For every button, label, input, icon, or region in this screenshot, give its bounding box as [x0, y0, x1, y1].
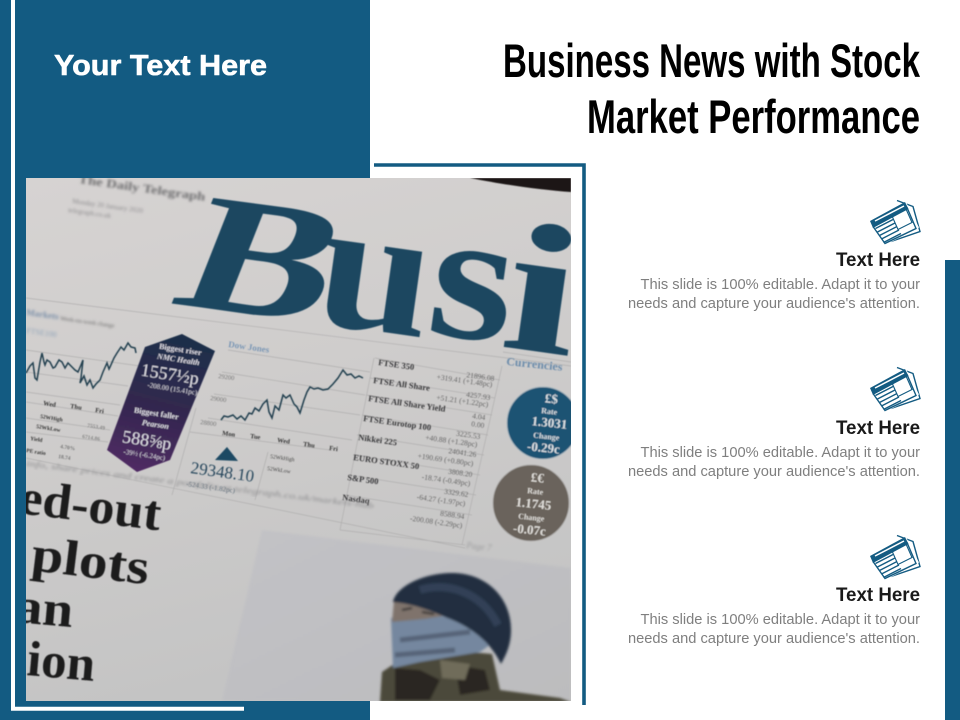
photo: left chart labels: 18.74: [58, 454, 71, 462]
photo: Dow Jones chart: Tue: [250, 433, 261, 441]
photo: dark background corner: [470, 178, 571, 192]
item 2: [628, 368, 920, 480]
photo: stock index table: -64.27 (-1.97pc): [416, 492, 466, 508]
photo: masthead word: B: [154, 159, 373, 358]
photo: biggest riser and faller tag: [107, 334, 215, 472]
photo: stock index table: 8588.94: [440, 509, 465, 521]
photo: pound to dollar badge: 1.3031: [531, 413, 568, 432]
photo: newspaper small masthead: The Daily Telegraph: [78, 172, 207, 204]
photo: biggest riser and faller tag: NMC Health: [156, 352, 201, 367]
photo: pound to euro badge: Change: [518, 512, 545, 523]
photo: stock index table: 3808.20: [448, 467, 473, 479]
photo: newspaper small masthead: Markets: [26, 307, 60, 322]
item 1 description: [628, 277, 920, 312]
photo: stock index table: FTSE 350: [378, 357, 415, 372]
photo: stock index table: 4.04: [472, 411, 486, 422]
photo: Dow Jones chart: 29200: [218, 373, 235, 382]
photo: left chart labels: PE ratio: [26, 448, 46, 457]
newspaper photo: [13, 159, 594, 702]
photo: left chart labels: 52WkLow: [36, 424, 61, 434]
photo: left line chart: [26, 343, 136, 388]
photo: Dow Jones chart: 52WkLow: [267, 466, 291, 475]
photo: stock index table: -18.74 (-0.49pc): [421, 472, 471, 488]
item 1: [628, 200, 920, 312]
photo: stock index table: [342, 357, 495, 530]
right blue bar: [945, 260, 960, 720]
photo: Dow Jones chart: 29000: [210, 395, 227, 404]
photo: headline text: an: [13, 577, 76, 638]
photo: stock index table: 0.00: [471, 419, 485, 430]
photo: pound to dollar badge: Rate: [541, 406, 558, 417]
photo: Dow Jones chart: 52WkHigh: [270, 454, 295, 463]
photo: stock index table: 21896.08: [466, 370, 495, 383]
photo: newspaper small masthead: telegraph.co.uk: [68, 206, 112, 220]
photo: currencies heading: Currencies: [506, 354, 564, 374]
photo: left chart labels: 52WHigh: [40, 414, 63, 424]
photo: left chart labels: Yield: [30, 436, 43, 444]
photo: left chart labels: Thu: [70, 403, 83, 412]
photo: stock index table: FTSE Eurotop 100: [363, 413, 432, 432]
photo: newspaper small masthead: Week-on-week change: [60, 316, 115, 330]
item 3 description: needs and capture your audience's attention.: [628, 631, 920, 647]
item 2 description: This slide is 100% editable. Adapt it to your: [641, 445, 920, 461]
item 3: [628, 536, 920, 647]
blue frame around photo: [374, 165, 584, 705]
item 3 description: This slide is 100% editable. Adapt it to your: [641, 612, 920, 628]
photo: caption strip: info, share prices and create a portfolio at telegraph.co.uk/markets-hub: [26, 459, 374, 511]
item 2 description: [628, 445, 920, 480]
photo: Dow Jones chart: Fri: [329, 445, 338, 453]
icon: newspaper: [870, 536, 920, 580]
photo: pound to euro badge: 1.1745: [515, 494, 553, 513]
photo: Dow Jones chart: 28800: [200, 419, 217, 428]
photo: newspaper small masthead: Monday 20 January 2020: [72, 197, 144, 215]
photo: page label: Page 7: [465, 540, 493, 553]
photo: table rules: [26, 298, 571, 548]
photo: masthead word: s: [418, 170, 530, 384]
photo: masthead word: i: [492, 184, 594, 397]
white frame on blue panel: [13, 0, 244, 709]
photo: Dow Jones index value: -524.33 (-1.82pc): [186, 480, 236, 495]
photo: biggest riser and faller tag: -39½ (-6.24pc): [123, 448, 166, 462]
photo: stock index table: +40.88 (+1.28pc): [425, 433, 478, 449]
photo: Dow Jones chart: Wed: [277, 437, 291, 446]
photo: pound to dollar badge: £$: [544, 390, 559, 407]
photo: stock index table: 24041.26: [448, 446, 477, 459]
photo: Dow Jones chart: Mon: [222, 430, 236, 439]
photo: stock index table: Nasdaq: [342, 492, 371, 506]
photo: stock index table: 3225.53: [456, 429, 481, 441]
photo: pound to euro badge: [493, 465, 569, 541]
photo: stock index table: -200.08 (-2.29pc): [410, 514, 463, 530]
photo: masked person: [380, 573, 571, 702]
item 3 description: [628, 612, 920, 647]
photo: inset picture: [334, 542, 419, 552]
photo: Dow Jones index value: 29348.10: [189, 458, 255, 486]
photo: stock index table: +319.41 (+1.48pc): [436, 372, 493, 389]
photo: stock index table: +51.21 (+1.22pc): [436, 393, 489, 409]
photo: Dow Jones chart: Dow Jones: [228, 339, 270, 355]
photo: stock index table: S&P 500: [347, 472, 379, 486]
photo: stock index table: +190.69 (+0.80pc): [417, 451, 474, 468]
photo: stock index table: 4257.93: [466, 390, 491, 402]
photo: pound to euro badge: Rate: [527, 486, 544, 497]
photo: newspaper small masthead: [26, 172, 207, 339]
photo: newspaper small masthead: FTSE100: [26, 326, 57, 339]
icon: newspaper: [870, 368, 920, 412]
photo: left chart labels: Fri: [95, 407, 105, 415]
photo: stock index table: Nikkei 225: [358, 432, 398, 447]
photo: pound to dollar badge: -0.29c: [526, 438, 561, 457]
photo: pound to euro badge: £€: [530, 469, 545, 486]
item 3 heading: Text Here: [836, 585, 920, 606]
photo: pound to dollar badge: [507, 387, 579, 459]
icon: newspaper: [870, 200, 920, 244]
photo: pound to euro badge: -0.07c: [512, 520, 547, 539]
photo: left chart labels: 4.70%: [60, 444, 76, 452]
photo: masthead word: u: [306, 160, 448, 378]
photo: biggest riser and faller tag: Biggest riser: [159, 342, 203, 357]
photo: headline text: ion: [25, 630, 98, 692]
photo: left chart labels: Wed: [43, 400, 57, 409]
item 2 description: needs and capture your audience's attention.: [628, 464, 920, 480]
photo: Dow Jones index value: [186, 447, 255, 495]
photo: stock index table: 3329.62: [444, 487, 469, 499]
photo: biggest riser and faller tag: 1557½p: [139, 360, 200, 389]
photo: left chart labels: [26, 400, 106, 462]
photo: masthead word: [171, 197, 571, 356]
photo: stock index table: EURO STOXX 50: [353, 452, 420, 471]
photo: left chart labels: 7553.49: [87, 423, 106, 432]
photo: stock index table: FTSE All Share: [373, 375, 431, 393]
item 1 description: This slide is 100% editable. Adapt it to your: [641, 277, 920, 293]
panel heading: Your Text Here: [54, 50, 267, 82]
left blue panel: [0, 0, 370, 720]
photo: headline text: ed-out: [17, 468, 165, 541]
photo: biggest riser and faller tag: 588⅝p: [121, 426, 173, 454]
photo: headline text: plots: [29, 525, 153, 595]
photo: Dow Jones chart: [200, 339, 363, 475]
photo: biggest riser and faller tag: Pearson: [141, 418, 170, 431]
item 1 heading: Text Here: [836, 250, 920, 271]
item 2 heading: Text Here: [836, 418, 920, 439]
photo: Dow Jones chart: Thu: [303, 441, 316, 450]
photo: biggest riser and faller tag: Biggest faller: [133, 406, 180, 422]
photo: left chart labels: 6714.86: [82, 434, 101, 443]
title: [503, 34, 921, 143]
photo: headline text: [26, 482, 162, 682]
item 1 description: needs and capture your audience's attention.: [628, 296, 920, 312]
photo: stock index table: FTSE All Share Yield: [368, 393, 446, 414]
photo: biggest riser and faller tag: -208.00 (15.41pc): [147, 381, 198, 397]
photo: pound to dollar badge: Change: [533, 431, 560, 442]
